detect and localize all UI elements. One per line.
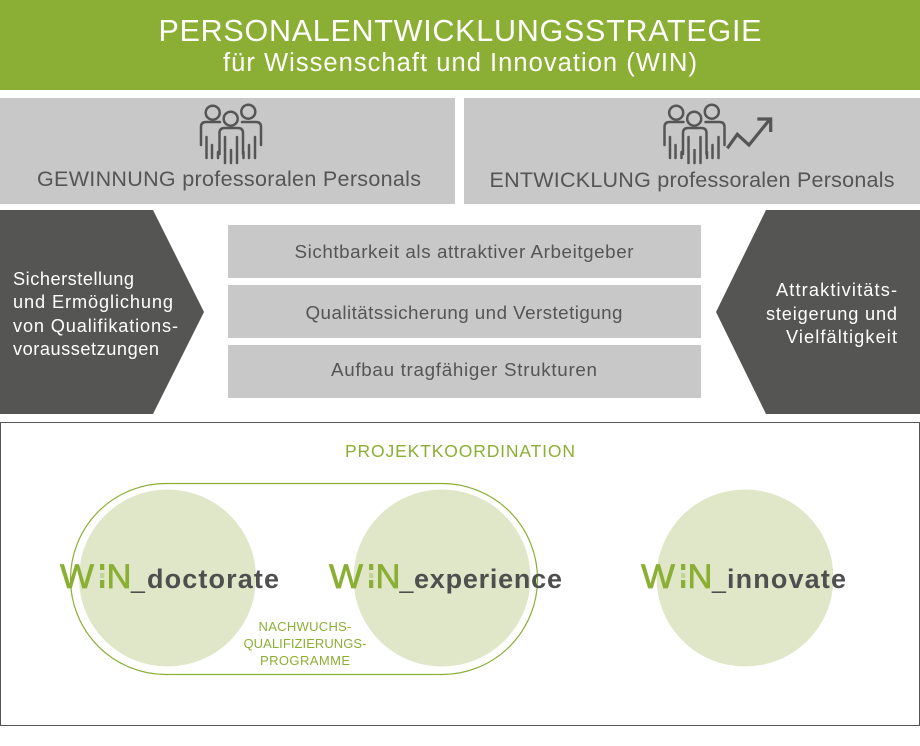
icon: group of people with rising arrow — [664, 105, 771, 163]
label: Nachwuchsqualifizierungsprogramme: QUALIFIZIERUNGS- — [244, 636, 366, 651]
logo: WIN_experience: N — [376, 558, 400, 596]
text: Sicherstellung: von Qualifikations- — [13, 316, 178, 336]
logo: WIN_doctorate: doctorate — [147, 564, 279, 594]
logo: WIN_doctorate: W — [60, 558, 94, 596]
circle: doctorate — [79, 490, 256, 666]
panel: Projektkoordination — [0, 422, 920, 726]
text: Sicherstellung: voraussetzungen — [13, 339, 159, 359]
label: Nachwuchsqualifizierungsprogramme: PROGRAMME — [260, 653, 350, 668]
logo: WIN_innovate — [641, 558, 846, 596]
bar: Sichtbarkeit: Sichtbarkeit als attraktiver Arbeitgeber — [294, 241, 634, 262]
circle: experience — [354, 490, 530, 666]
panel: Entwicklung — [464, 98, 920, 204]
logo: WIN_experience: W — [329, 558, 363, 596]
bar: Aufbau — [228, 345, 701, 398]
heading: Gewinnung: GEWINNUNG professoralen Personals — [37, 167, 421, 191]
subtitle: für Wissenschaft und Innovation (WIN) — [223, 49, 697, 77]
logo: WIN_experience: _ — [398, 566, 414, 594]
logo: WIN_doctorate: N — [106, 558, 132, 596]
title banner — [0, 0, 920, 90]
heading: Entwicklung: ENTWICKLUNG professoralen Personals — [490, 168, 894, 192]
logo: WIN_innovate: W — [641, 558, 675, 596]
logo: WIN_experience: experience — [414, 564, 562, 594]
text: Attraktivität: Vielfältigkeit — [786, 327, 897, 347]
panel: Gewinnung — [0, 98, 455, 204]
circle: innovate — [656, 490, 834, 666]
text: Attraktivität: steigerung und — [766, 304, 897, 324]
title: PERSONALENTWICKLUNGSSTRATEGIE — [158, 14, 762, 48]
icon: group of people — [201, 105, 261, 163]
capsule outline — [70, 484, 538, 674]
logo: WIN_doctorate: _ — [130, 566, 146, 594]
bar: Qualitätssicherung — [228, 285, 701, 338]
logo: WIN_doctorate — [60, 558, 279, 596]
bar: Qualitätssicherung: Qualitätssicherung und Verstetigung — [306, 302, 622, 323]
logo: WIN_experience — [329, 558, 562, 596]
bar: Sichtbarkeit — [228, 225, 701, 278]
label: Nachwuchsqualifizierungsprogramme — [244, 619, 366, 668]
text: Attraktivität: Attraktivitäts- — [776, 280, 897, 300]
bar: Aufbau: Aufbau tragfähiger Strukturen — [331, 359, 597, 380]
label: Nachwuchsqualifizierungsprogramme: NACHWUCHS- — [258, 619, 352, 634]
logo: WIN_innovate: N — [688, 558, 712, 596]
arrow: left qualification — [0, 210, 204, 414]
arrow: right attractiveness — [716, 210, 920, 414]
logo: WIN_innovate: _ — [711, 566, 727, 594]
logo: WIN_innovate: innovate — [727, 564, 846, 594]
text: Sicherstellung: Sicherstellung — [13, 269, 134, 289]
text: Sicherstellung — [13, 269, 178, 359]
text: Sicherstellung: und Ermöglichung — [13, 292, 173, 312]
heading: Projektkoordination: PROJEKTKOORDINATION — [345, 441, 575, 461]
text: Attraktivität — [766, 280, 897, 347]
